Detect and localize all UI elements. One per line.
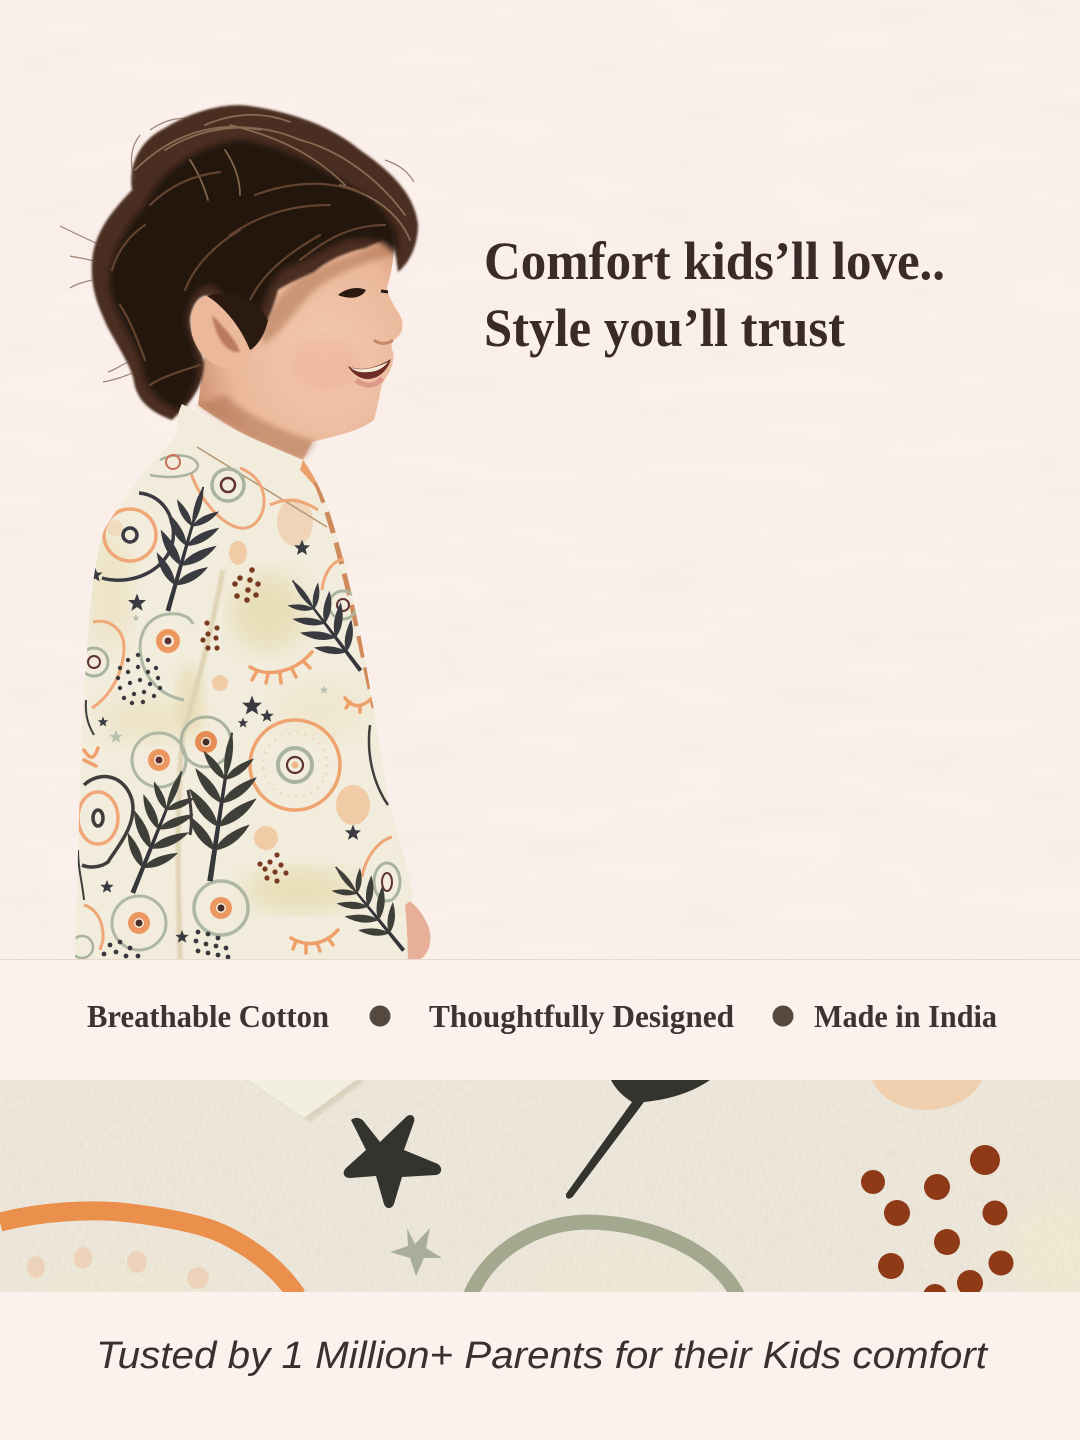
hair outer brown mass: [92, 105, 418, 420]
feature strip: [0, 960, 1080, 1080]
faint peach dots: [27, 1247, 209, 1289]
rust dots: [861, 1145, 1014, 1308]
hand: [404, 898, 430, 960]
feature: Breathable Cotton: Breathable Cotton: [87, 998, 329, 1034]
rust dot clusters: [200, 567, 289, 884]
neck and face: [198, 232, 403, 460]
temple shadow under hair: [262, 238, 392, 345]
hair: [60, 105, 418, 420]
cheek blush: [291, 337, 359, 393]
circle motifs: [71, 455, 400, 958]
shirt: [71, 404, 422, 965]
sideburn lock: [207, 293, 268, 350]
black dot clusters: [102, 653, 230, 959]
neck shadow: [198, 395, 316, 460]
leaves: [106, 479, 422, 965]
feature: Thoughtfully Designed: Thoughtfully Designed: [429, 998, 734, 1034]
fabric tint: [574, 1212, 1080, 1288]
shirt cuff: [388, 800, 414, 905]
orange arc: [0, 1211, 297, 1296]
headline line 2: Style you’ll trust: [484, 298, 845, 358]
inner collar: [300, 460, 324, 496]
small grey star: [390, 1228, 442, 1276]
hair strands: [112, 115, 410, 385]
collar tip: [248, 1080, 366, 1122]
eyelash motifs: [84, 652, 372, 953]
black star: [344, 1115, 441, 1208]
feature: Made in India: Made in India: [814, 998, 997, 1034]
peach blob: [872, 1080, 982, 1110]
small stars: [87, 540, 361, 943]
peach blobs: [107, 498, 370, 850]
collar seam: [197, 447, 327, 527]
separator dot 2: [772, 1006, 794, 1026]
watercolour patches: [88, 530, 365, 912]
eye: [338, 288, 366, 298]
mouth: [348, 359, 391, 379]
sleeve seam shadow: [178, 570, 223, 960]
stray hairs: [60, 118, 414, 382]
trust statement: Tusted by 1 Million+ Parents for their Kids comfort: [96, 1335, 989, 1377]
headline line 1: Comfort kids’ll love..: [484, 231, 945, 291]
ear: [191, 296, 250, 369]
green arc: [470, 1222, 738, 1296]
dark sleeve fold mark: [188, 790, 191, 835]
separator dot 1: [370, 1006, 390, 1026]
fabric print band: [0, 1080, 1080, 1308]
inner ear: [212, 315, 240, 352]
placket: [316, 482, 374, 708]
hair dark core: [110, 140, 398, 410]
nose shadow: [374, 340, 393, 343]
headline: [484, 231, 945, 358]
boy photo illustration: [60, 105, 430, 965]
fabric grain: [0, 1080, 1080, 1292]
bottom strip: [0, 1292, 1080, 1440]
leaf stem: [566, 1080, 710, 1199]
